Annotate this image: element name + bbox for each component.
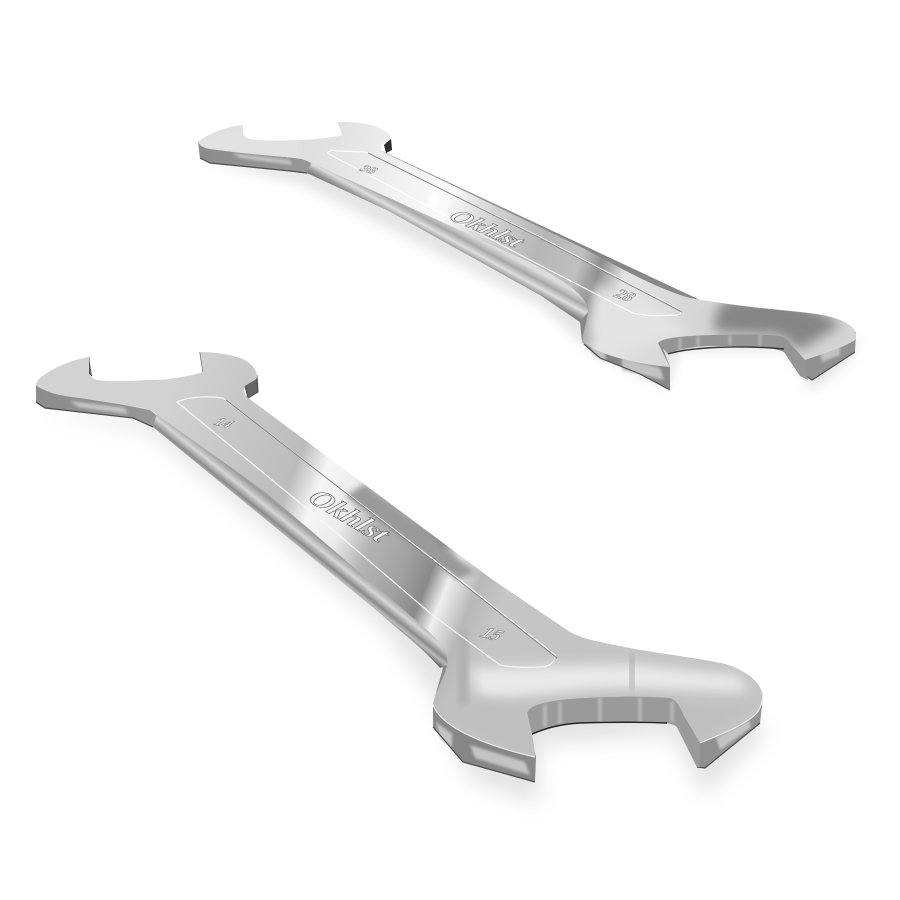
front wrench side mottling xyxy=(70,401,750,775)
ground shadow: rear wrench xyxy=(202,160,858,392)
front wrench upper band dark xyxy=(345,484,475,580)
rear wrench mouth wall xyxy=(658,334,808,380)
front wrench size number bottom: 15 xyxy=(474,625,509,644)
front wrench head band dark xyxy=(476,694,696,754)
front wrench jaw dark inner edges xyxy=(89,352,258,398)
rear wrench top face xyxy=(198,122,856,367)
rear wrench groove panel xyxy=(327,150,681,316)
illustration: two chrome open-end wrenches xyxy=(36,122,858,804)
rear wrench groove shadow xyxy=(368,153,682,312)
rear wrench jaw shade xyxy=(205,148,282,157)
rear wrench highlight on head xyxy=(590,285,690,350)
rear wrench bright spot xyxy=(429,191,439,209)
rear wrench size number top: 38 xyxy=(355,164,382,176)
rear wrench logo: Okhlst xyxy=(442,207,532,251)
front wrench head band light xyxy=(470,664,748,700)
rear wrench size number bottom: 28 xyxy=(609,286,641,304)
rear wrench side mottling xyxy=(232,153,840,380)
front wrench mouth wall xyxy=(527,697,700,767)
front wrench bottom edge line xyxy=(530,722,667,735)
ground shadow: front wrench xyxy=(42,412,765,805)
front wrench groove shadow xyxy=(226,400,557,658)
front wrench side bottom line xyxy=(36,402,760,782)
rear wrench dark jaw shadow xyxy=(338,122,392,153)
front wrench vertical reflection left xyxy=(458,630,468,705)
rear wrench mouth stripes xyxy=(680,335,760,351)
front wrench size number top: 14 xyxy=(209,416,238,430)
front wrench face rim xyxy=(433,692,763,757)
wrench: rear xyxy=(198,122,856,390)
rear wrench side bottom line xyxy=(200,158,855,390)
front wrench side thickness xyxy=(36,385,763,782)
wrench: front xyxy=(20,340,780,782)
front wrench logo: Okhlst xyxy=(301,485,397,547)
front wrench vertical reflection xyxy=(630,655,634,690)
front wrench mouth stripes xyxy=(545,698,672,728)
rear wrench bevel strip xyxy=(307,163,588,322)
rear wrench side thickness xyxy=(198,142,856,390)
front wrench groove panel xyxy=(177,397,555,667)
rear wrench dark reflection on head xyxy=(715,299,840,350)
front wrench top face xyxy=(36,352,762,756)
front wrench bevel strip xyxy=(153,413,447,668)
rear wrench bottom edge line xyxy=(668,347,784,354)
